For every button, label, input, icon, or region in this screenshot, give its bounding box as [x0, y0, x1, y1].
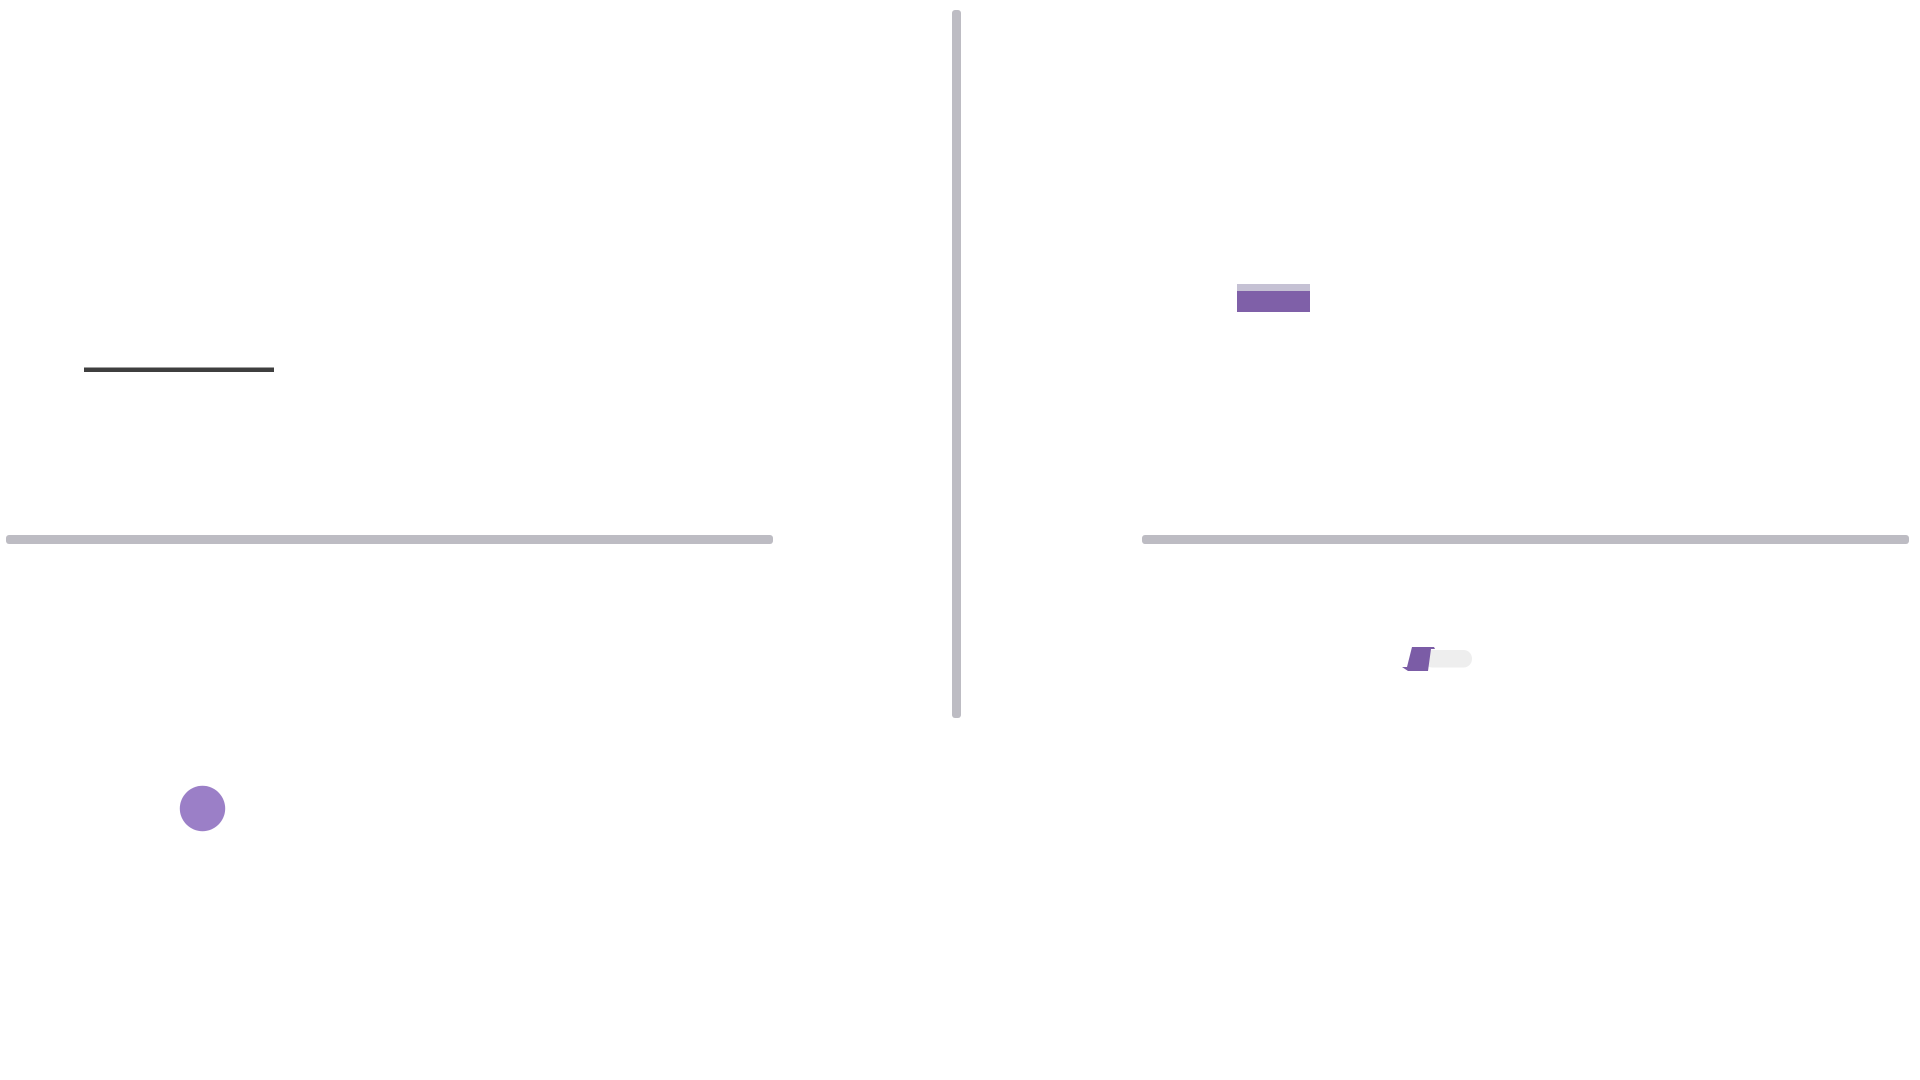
toggle icon	[1402, 647, 1472, 671]
vertical divider bar	[952, 10, 961, 718]
purple circle	[180, 786, 225, 831]
right horizontal bar	[1142, 535, 1909, 544]
left horizontal bar	[6, 535, 773, 544]
dark underline	[84, 368, 274, 372]
purple rectangle with light top band	[1237, 284, 1310, 312]
